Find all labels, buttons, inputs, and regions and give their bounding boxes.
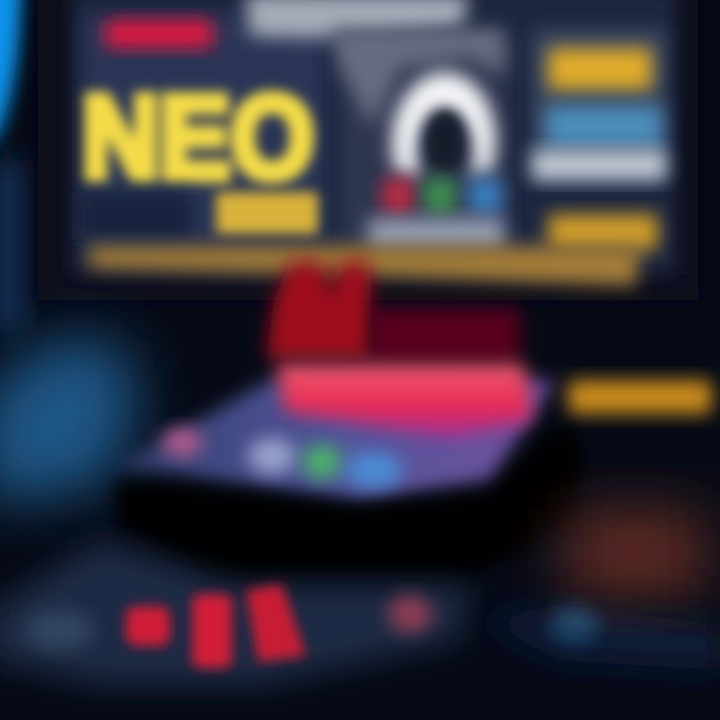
left panel tint [84,14,324,246]
red heading [105,20,213,48]
grey shoulder shapes [330,28,505,128]
red dot [382,178,414,214]
pink button [162,428,202,456]
black box [116,424,584,578]
blue edge light [0,0,22,140]
blue key right [551,606,599,642]
keyboard [0,540,720,685]
panel: centre portrait [245,0,508,250]
grey button [248,438,296,474]
white caption [532,150,666,180]
dark red block [370,308,520,362]
yellow label [548,48,652,90]
top white banner [245,0,470,38]
white headphones [392,72,496,178]
blue dot [468,178,502,214]
monitor bezel [38,0,698,300]
yellow subheading [216,192,318,234]
red keys [126,584,306,668]
red figure [266,262,372,358]
blue chart strip [546,106,662,148]
tablet buttons [162,428,402,488]
grey caption [368,218,504,250]
right panel base [532,28,666,183]
key 3 [246,584,306,662]
yellow tag [548,214,658,250]
brown glow [565,510,705,595]
orange label [568,380,712,414]
dark text block [78,192,192,240]
key 1 [126,606,170,646]
left desk glow [0,340,140,500]
green dot [424,178,456,214]
left wall glow [0,160,24,330]
monitor screen [72,0,676,274]
key 2 [192,594,232,668]
monitor [38,0,698,300]
pink band [276,364,532,438]
small rose key [388,595,432,633]
panel: left headline [78,14,324,246]
keyboard base [0,540,470,685]
right desk [480,605,720,670]
tablet surface [118,380,556,500]
heading NEO: NEO [82,72,314,204]
dark centre figure [425,110,465,174]
orange strip [88,246,640,286]
panel: right info [532,28,666,250]
green button [302,445,342,479]
grey key left [26,610,94,650]
blue button [346,452,402,488]
grey panel [340,40,508,250]
